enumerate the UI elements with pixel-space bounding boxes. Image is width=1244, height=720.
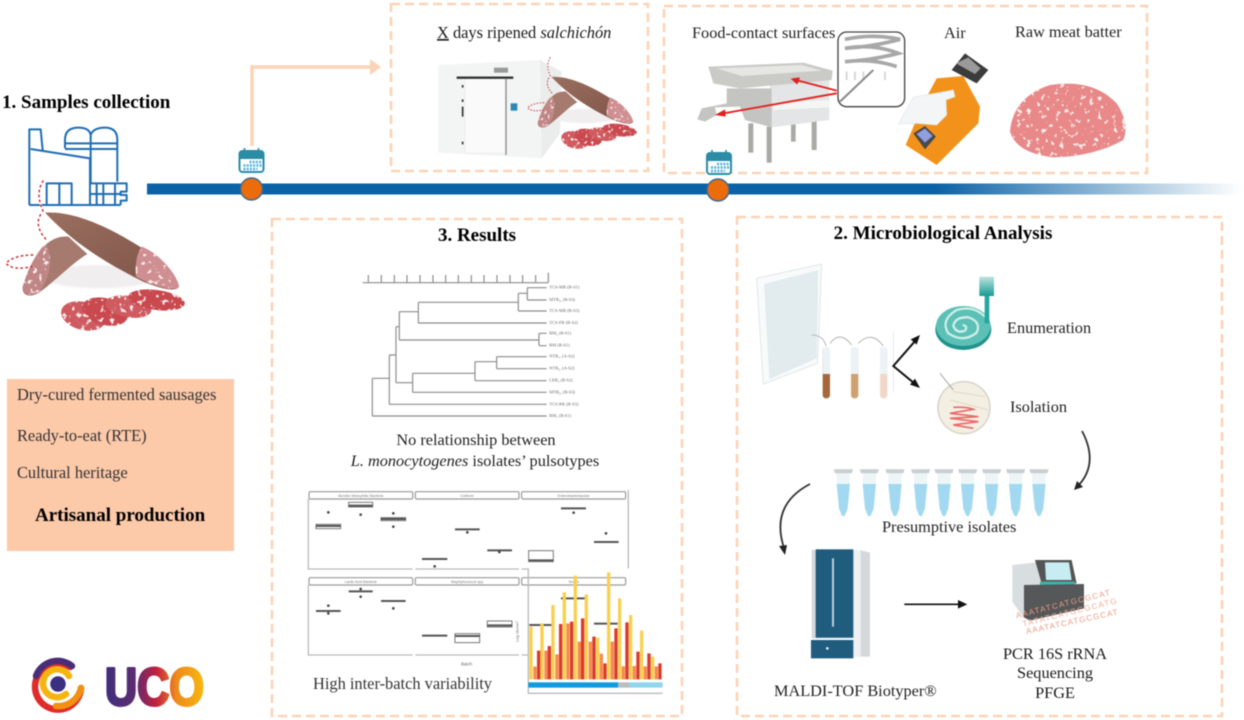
image: air sampler: [898, 53, 988, 165]
label: PCR, sequencing, PFGE: Sequencing: [1017, 663, 1093, 682]
chart: pulsotype dendrogram: TCS-MB (B-S1): [549, 285, 580, 290]
caption: dendrogram: L. monocytogenes isolates’ pulsotypes: [350, 451, 599, 470]
chart: pulsotype dendrogram: MTB₂, (B-S3): [549, 297, 576, 303]
caption: inter-batch variability: High inter-batch variability: [313, 674, 493, 693]
label: PCR, sequencing, PFGE: [1003, 644, 1107, 702]
label: presumptive isolates: Presumptive isolates: [882, 517, 1016, 536]
heading: samples collection: 1. Samples collection: [2, 92, 171, 113]
timeline: [147, 184, 1242, 194]
heading: microbiological analysis: 2. Microbiological Analysis: [834, 223, 1052, 244]
chart: pulsotype dendrogram: TCS-RR (B-S3): [549, 401, 579, 406]
callout: product characteristics: Artisanal production: [35, 505, 206, 526]
label: PCR, sequencing, PFGE: PCR 16S rRNA: [1003, 644, 1107, 663]
logo: research institute mark: [35, 661, 81, 710]
icon: factory: [29, 128, 127, 205]
image: dry-cured sausage: [6, 179, 186, 335]
chart: microbial counts by batch: Lactic Acid Bacteria: [345, 580, 378, 584]
chart: microbial counts by batch: [308, 490, 663, 693]
image: MALDI-TOF instrument: [811, 549, 870, 658]
image: ripening chamber: [438, 60, 562, 158]
chart: pulsotype dendrogram: RM₁ (B-S1): [549, 413, 572, 418]
arrow: ripening time: [252, 59, 381, 146]
bars: red, orange, yellow series: [531, 572, 660, 679]
panel: microbiological analysis: [737, 217, 1222, 716]
arrow: isolation to isolates: [1074, 431, 1090, 490]
caption: dendrogram: No relationship between: [396, 430, 556, 449]
chart: pulsotype dendrogram: MTB₃, (B-S3): [549, 389, 576, 395]
chart: pulsotype dendrogram: NTB₂, (A-S2): [549, 366, 575, 372]
image: sequencer with DNA letters: [1012, 560, 1118, 636]
image: microtubes: [834, 469, 1049, 516]
icon: calendar, second sampling: [707, 150, 731, 174]
label: isolation: Isolation: [1010, 397, 1067, 416]
chart: pulsotype dendrogram: TCS-MB (B-S3): [549, 308, 580, 313]
label: raw meat batter: Raw meat batter: [1015, 22, 1122, 41]
chart: pulsotype dendrogram: LEB₂ (B-S2): [549, 378, 573, 383]
image: isolation plate: [938, 373, 990, 434]
image: sequencer with DNA letters: AAATATCATGCGCAT: [1025, 608, 1118, 636]
chart: microbial counts by batch: Yeasts: [568, 580, 579, 584]
image: meat grinder with swab inset: [697, 32, 905, 163]
caption: dendrogram: [350, 430, 599, 470]
chart: pulsotype dendrogram: [363, 273, 580, 418]
arrow: isolates to MALDI-TOF: [779, 484, 810, 555]
callout: product characteristics: Ready-to-eat (RTE): [17, 426, 147, 445]
chart: pulsotype dendrogram: RM₂ (B-S1): [549, 330, 572, 335]
label: food-contact surfaces: Food-contact surfaces: [692, 23, 835, 42]
image: ripened sausage: [528, 57, 638, 152]
chart: microbial counts by batch: Coliform: [460, 494, 474, 498]
icon: calendar, first sampling: [240, 148, 264, 172]
marker: second time point: [707, 179, 729, 201]
panel: ripened salchichón: [391, 4, 648, 171]
image: spiral plater: [935, 277, 994, 350]
label: enumeration: Enumeration: [1007, 318, 1091, 337]
image: stomacher bag and dilution tubes: [757, 264, 893, 398]
chart: microbial counts by batch: Batch: [461, 661, 473, 666]
chart: pulsotype dendrogram: TCS-FR (B-S2): [549, 320, 578, 325]
heading: results: 3. Results: [438, 225, 516, 246]
chart: microbial counts by batch: Enterobacteriaceae: [558, 494, 589, 498]
logo: UCO: UCO: [105, 658, 204, 717]
label: MALDI-TOF: MALDI-TOF Biotyper®: [774, 681, 937, 700]
image: sequencer with DNA letters: AAATATCATGCGCAT: [1015, 588, 1111, 620]
chart: pulsotype dendrogram: RM (B-S1): [549, 343, 570, 348]
chart: microbial counts by batch: Aerobic Mesophilic Bacteria: [338, 494, 384, 498]
heading: X days ripened: X days ripened salchichón: [437, 23, 611, 42]
image: sequencer with DNA letters: TATATCATGCGCATG: [1022, 596, 1118, 629]
label: air: Air: [944, 23, 966, 42]
callout: product characteristics: Cultural heritage: [17, 463, 128, 482]
image: raw meat batter: [1010, 84, 1126, 157]
label: PCR, sequencing, PFGE: PFGE: [1035, 683, 1075, 702]
callout: product characteristics: Dry-cured fermented sausages: [17, 385, 216, 404]
callout: product characteristics: [7, 379, 234, 551]
marker: first time point: [240, 178, 262, 200]
chart: pulsotype dendrogram: NTB₁, (A-S2): [549, 354, 575, 360]
arrows: split to enumeration and isolation: [893, 335, 920, 388]
chart: microbial counts by batch: Log cfu/cm²: [515, 621, 520, 642]
panel: sampling points: [664, 6, 1147, 173]
panel: results: [272, 219, 682, 716]
chart: microbial counts by batch: Staphylococcus spp: [451, 580, 483, 584]
arrow: MALDI-TOF to sequencing: [904, 600, 967, 609]
